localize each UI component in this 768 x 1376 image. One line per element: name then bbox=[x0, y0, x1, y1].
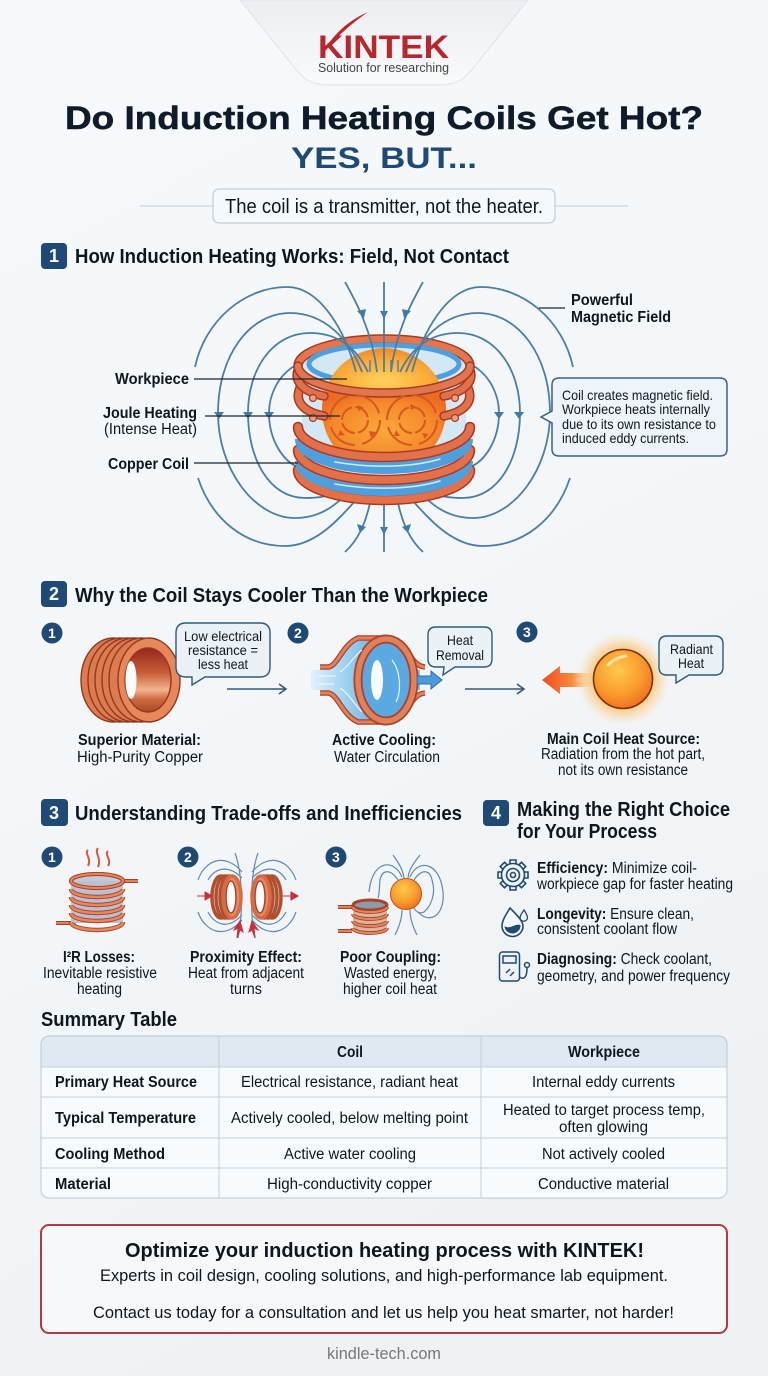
caption: higher coil heat bbox=[343, 981, 438, 998]
panel: longevity tip bbox=[502, 906, 694, 938]
text: longevity line 2: consistent coolant flow bbox=[537, 921, 678, 938]
callout: heat removal: Heat bbox=[447, 632, 473, 648]
icon: field lines bbox=[369, 855, 443, 935]
row: typical temperature: often glowing bbox=[559, 1119, 648, 1136]
caption: not its own resistance bbox=[558, 762, 688, 779]
tagline pill bbox=[140, 189, 628, 223]
callout: explanation: due to its own resistance to bbox=[562, 416, 716, 432]
table header: Coil bbox=[337, 1044, 363, 1061]
section 4 heading: 4 bbox=[491, 803, 501, 823]
caption: Wasted energy, bbox=[344, 965, 437, 982]
callout: radiant heat bbox=[659, 636, 723, 683]
section 2 heading: 2 bbox=[49, 584, 59, 604]
table header: Workpiece bbox=[568, 1044, 640, 1061]
number badge 3 bbox=[516, 622, 538, 642]
row: primary heat source: Electrical resistance, radiant heat bbox=[241, 1074, 459, 1091]
row: cooling method bbox=[55, 1146, 665, 1163]
row: typical temperature: Heated to target process temp, bbox=[503, 1102, 705, 1119]
label: powerful magnetic field: Powerful bbox=[571, 292, 633, 309]
caption: Radiation from the hot part, bbox=[541, 746, 705, 763]
icon: water cooled coil bbox=[311, 638, 425, 722]
callout: heat removal: Removal bbox=[436, 647, 484, 663]
row: material: High-conductivity copper bbox=[267, 1176, 432, 1193]
text: efficiency line 2: workpiece gap for faster heating bbox=[536, 876, 733, 893]
row: material: Material bbox=[55, 1176, 111, 1193]
table header bbox=[337, 1044, 640, 1061]
caption: Water Circulation bbox=[334, 749, 440, 766]
panel: poor coupling bbox=[326, 846, 443, 998]
callout: explanation: induced eddy currents. bbox=[562, 430, 689, 446]
coil side turns bbox=[297, 370, 471, 422]
label: powerful magnetic field bbox=[539, 292, 671, 326]
caption: Main Coil Heat Source: bbox=[547, 731, 700, 748]
section 4 heading: Making the Right Choice bbox=[517, 799, 730, 821]
panel: efficiency tip bbox=[498, 860, 733, 893]
callout: explanation: Coil creates magnetic field. bbox=[562, 387, 713, 403]
caption bbox=[43, 949, 157, 998]
caption: turns bbox=[230, 981, 262, 998]
icon: meter bbox=[500, 952, 530, 981]
row: cooling method: Active water cooling bbox=[284, 1146, 416, 1163]
section 3 heading: 3 bbox=[49, 803, 59, 823]
icon: field lines bbox=[198, 853, 296, 938]
caption: Inevitable resistive bbox=[43, 965, 157, 982]
label: joule heating: (Intense Heat) bbox=[104, 421, 197, 438]
summary table heading: Summary Table bbox=[41, 1009, 177, 1031]
number badge 2: 2 bbox=[184, 849, 192, 865]
number badge 1: 1 bbox=[48, 849, 56, 865]
caption bbox=[77, 732, 203, 766]
number badge 3: 3 bbox=[332, 849, 340, 865]
icon: glowing sphere bbox=[576, 632, 670, 726]
logo wordmark: KINTEK bbox=[318, 29, 449, 65]
subtitle: YES, BUT... bbox=[291, 142, 477, 175]
caption: Active Cooling: bbox=[332, 732, 436, 749]
title: Do Induction Heating Coils Get Hot? bbox=[65, 100, 703, 136]
callout: low resistance: resistance = bbox=[188, 642, 258, 658]
row: cooling method: Not actively cooled bbox=[542, 1146, 665, 1163]
panel: proximity effect bbox=[178, 846, 305, 998]
label: powerful magnetic field: Magnetic Field bbox=[571, 309, 671, 326]
eddy currents bbox=[330, 395, 437, 445]
icon: force arrows bbox=[197, 892, 298, 938]
caption: Poor Coupling: bbox=[340, 949, 441, 966]
caption: I²R Losses: bbox=[63, 949, 135, 966]
icon: adjacent coils bbox=[212, 876, 281, 918]
caption: High-Purity Copper bbox=[77, 749, 203, 766]
tagline pill: The coil is a transmitter, not the heater. bbox=[225, 195, 543, 218]
cta line 1: Experts in coil design, cooling solutions, and high-performance lab equipment. bbox=[100, 1266, 668, 1285]
cta line 2: Contact us today for a consultation and let us help you heat smarter, not harder! bbox=[93, 1303, 674, 1322]
icon: outflow arrow bbox=[417, 671, 442, 689]
text: efficiency: Efficiency: Minimize coil- bbox=[537, 860, 697, 877]
call to action box bbox=[41, 1225, 727, 1333]
label: copper coil: Copper Coil bbox=[108, 456, 189, 473]
text: diagnosing: Diagnosing: Check coolant, bbox=[537, 951, 712, 968]
panel: diagnosing tip bbox=[500, 951, 730, 985]
panel: I2R losses bbox=[42, 846, 157, 998]
panel: active cooling bbox=[288, 622, 492, 766]
caption bbox=[541, 731, 705, 779]
number badge 2: 2 bbox=[294, 625, 302, 641]
field direction arrowheads bbox=[214, 309, 524, 535]
section 4 heading: for Your Process bbox=[517, 821, 657, 843]
label: joule heating: Joule Heating bbox=[103, 405, 197, 422]
row: primary heat source: Primary Heat Source bbox=[55, 1074, 197, 1091]
magnetic field lines bbox=[195, 282, 573, 552]
bottom coil turns bbox=[298, 427, 470, 500]
caption: Proximity Effect: bbox=[190, 949, 302, 966]
section 1 heading: How Induction Heating Works: Field, Not Contact bbox=[75, 246, 509, 268]
coil front top ring bbox=[298, 366, 470, 393]
section 1 heading: 1 bbox=[49, 246, 59, 266]
number badge 2 bbox=[288, 622, 308, 644]
number badge 1 bbox=[42, 622, 62, 644]
callout: radiant heat: Heat bbox=[678, 655, 704, 671]
icon: copper coil cylinder bbox=[81, 638, 180, 722]
caption: Heat from adjacent bbox=[188, 965, 305, 982]
icon: radiation arrow bbox=[542, 666, 592, 694]
callout: heat removal bbox=[428, 627, 492, 675]
text: diagnosing line 2: geometry, and power frequency bbox=[537, 968, 730, 985]
section 3 heading: Understanding Trade-offs and Inefficiencies bbox=[75, 803, 462, 825]
caption: heating bbox=[77, 981, 122, 998]
number badge 3: 3 bbox=[523, 624, 531, 640]
arrow: step 1 to 2 bbox=[227, 684, 286, 694]
induction coil diagram bbox=[103, 282, 727, 552]
callout: low resistance bbox=[176, 623, 270, 685]
number badge 3 bbox=[326, 846, 346, 868]
label: joule heating bbox=[103, 405, 340, 438]
row: typical temperature: Typical Temperature bbox=[55, 1110, 196, 1127]
icon: water drops bbox=[502, 908, 528, 936]
label: workpiece: Workpiece bbox=[115, 371, 189, 388]
row: material bbox=[55, 1176, 669, 1193]
row: typical temperature: Actively cooled, below melting point bbox=[231, 1110, 469, 1127]
icon: resistive coil bbox=[56, 874, 138, 930]
row: material: Conductive material bbox=[538, 1176, 669, 1193]
logo swoosh bbox=[320, 12, 368, 58]
caption bbox=[340, 949, 441, 998]
logo tagline: Solution for researching bbox=[318, 60, 449, 75]
cta heading: Optimize your induction heating process with KINTEK! bbox=[125, 1239, 644, 1262]
icon: offset coil bbox=[338, 900, 387, 933]
panel: radiant heat source bbox=[516, 622, 723, 779]
section 4 heading bbox=[483, 799, 730, 843]
icon: sphere bbox=[390, 878, 422, 910]
callout: explanation bbox=[541, 378, 727, 456]
row: cooling method: Cooling Method bbox=[55, 1146, 165, 1163]
callout: low resistance: Low electrical bbox=[184, 628, 262, 644]
row: primary heat source bbox=[55, 1074, 675, 1091]
number badge 1 bbox=[42, 846, 62, 868]
section 2 heading: Why the Coil Stays Cooler Than the Workpiece bbox=[75, 585, 488, 607]
row: primary heat source: Internal eddy currents bbox=[532, 1074, 675, 1091]
coil back ring bbox=[298, 339, 470, 456]
icon: steam bbox=[87, 848, 109, 867]
logo tab bbox=[240, 0, 528, 85]
panel: superior material bbox=[42, 622, 270, 766]
icon: gear bbox=[498, 860, 528, 890]
number badge 1: 1 bbox=[48, 625, 56, 641]
caption bbox=[188, 949, 305, 998]
caption: Superior Material: bbox=[78, 732, 201, 749]
workpiece sphere bbox=[322, 348, 446, 452]
callout: explanation: Workpiece heats internally bbox=[562, 401, 710, 417]
number badge 2 bbox=[178, 846, 198, 868]
summary table bbox=[41, 1036, 727, 1198]
arrow: step 2 to 3 bbox=[465, 684, 524, 694]
callout: low resistance: less heat bbox=[198, 656, 248, 672]
footer url: kindle-tech.com bbox=[327, 1345, 441, 1363]
callout: radiant heat: Radiant bbox=[670, 641, 713, 657]
row: typical temperature bbox=[55, 1102, 705, 1136]
caption bbox=[332, 732, 440, 766]
text: longevity: Longevity: Ensure clean, bbox=[537, 906, 694, 923]
